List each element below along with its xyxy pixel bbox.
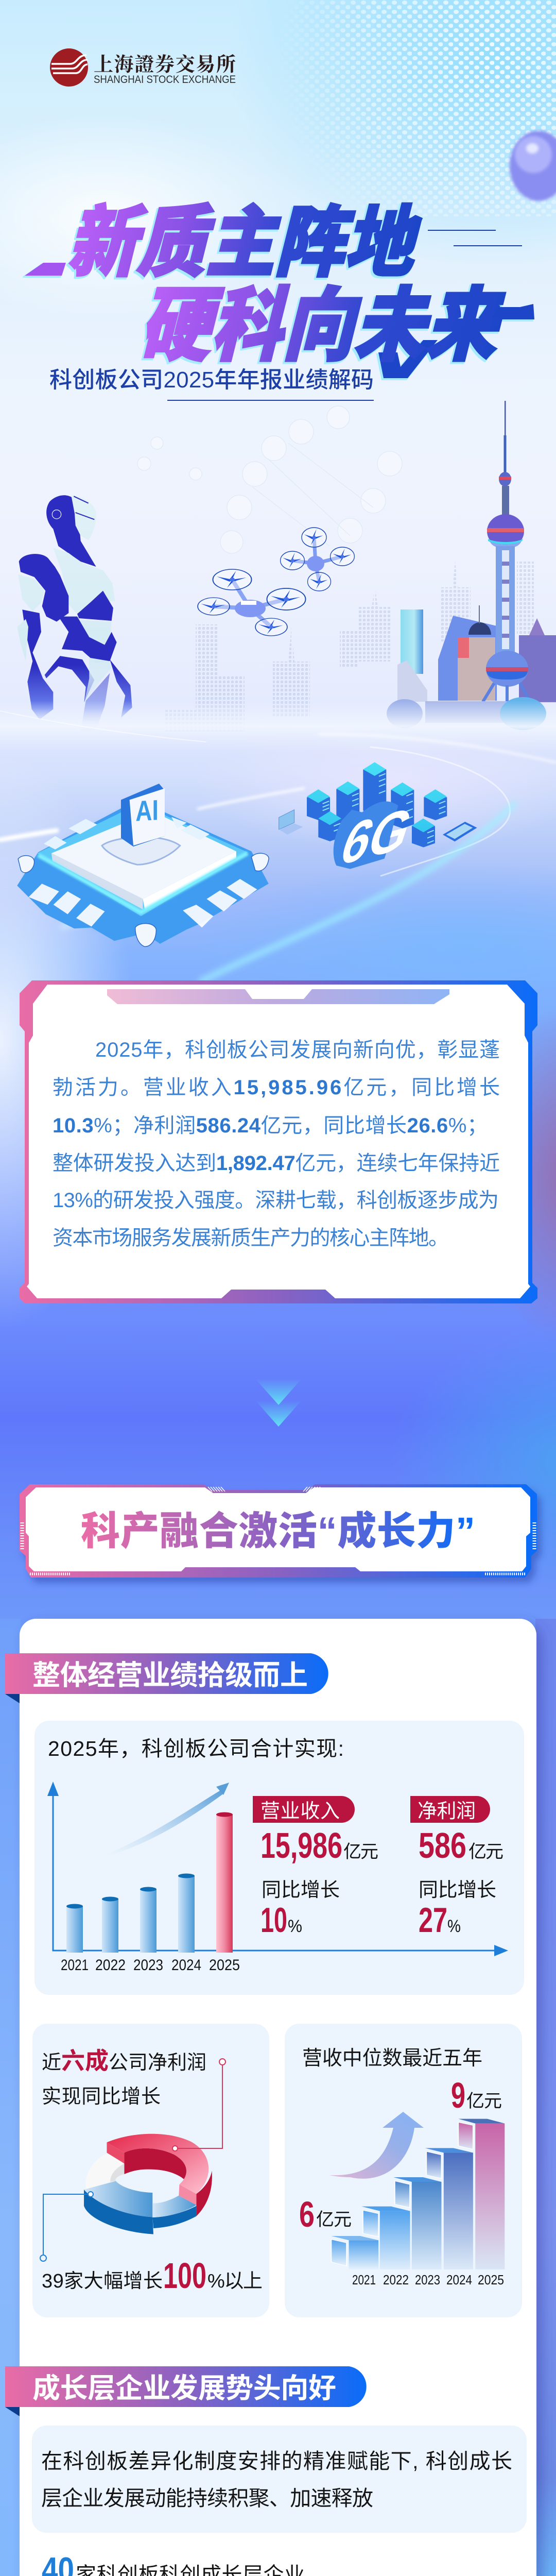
chart: revenue bars: 2023 [133, 1957, 163, 1974]
value: 2025: 亿元 [466, 2091, 502, 2111]
metric: revenue: % [288, 1917, 302, 1936]
illustration: AI chip: AI [135, 794, 159, 827]
main white card [20, 1619, 536, 2576]
year labels: 2022 [383, 2272, 409, 2287]
metric: revenue: 15,986 [260, 1825, 342, 1866]
section banner [20, 1484, 537, 1578]
title accent lines [428, 230, 522, 246]
stat: 40 companies [42, 2550, 305, 2576]
arrow: upward trend [329, 2112, 424, 2179]
title: 新质主阵地 [63, 200, 430, 286]
panel text: 近六成公司净利润 [42, 2047, 206, 2074]
metric: revenue: 同比增长 [262, 1879, 340, 1901]
logo: Shanghai Stock Exchange: 上海證券交易所 [94, 48, 236, 77]
intro paragraph [53, 1039, 500, 1249]
robot illustration [17, 495, 132, 732]
city skyline with Oriental Pearl tower [387, 401, 556, 730]
metric: net profit: 亿元 [468, 1842, 503, 1862]
year labels: 2021 [352, 2272, 376, 2287]
chart: revenue bars: 2025 [209, 1957, 240, 1974]
panel: growth-tier intro: 在科创板差异化制度安排的精准赋能下, 科创成长 [41, 2449, 512, 2473]
heading: overall performance: 整体经营业绩拾级而上 [32, 1660, 308, 1691]
panel: median revenue bars [285, 2024, 522, 2317]
year labels: 2023 [415, 2272, 440, 2287]
value: 2025: 9 [451, 2075, 465, 2115]
chart: revenue bars: 2021 [61, 1957, 89, 1974]
metric: net profit: 27 [419, 1901, 447, 1940]
panel: profitable share donut [32, 2024, 269, 2317]
title: 硬科向未来 [135, 281, 514, 370]
panel caption: %以上 [207, 2270, 263, 2292]
fog band [0, 701, 556, 752]
stepped bars [332, 2119, 505, 2269]
dotted city silhouettes [164, 562, 534, 732]
intro paragraph: 整体研发投入达到1,892.47亿元，连续七年保持近 [53, 1152, 500, 1175]
panel: growth-tier intro [32, 2426, 527, 2533]
intro paragraph: 2025年，科创板公司发展向新向优，彰显蓬 [95, 1039, 500, 1061]
year labels: 2024 [446, 2272, 472, 2287]
donut chart [84, 2134, 212, 2234]
value: 2021: 亿元 [316, 2210, 352, 2230]
arrow: chevrons [255, 1379, 302, 1427]
illustration: 6G network: 6G [333, 794, 421, 878]
panel heading: 2025年，科创板公司合计实现: [48, 1737, 344, 1760]
title [25, 200, 534, 378]
background dot pattern [297, 1, 556, 216]
metric: net profit: 同比增长 [419, 1879, 496, 1901]
value: 2021: 6 [299, 2194, 315, 2234]
year labels [352, 2272, 504, 2287]
metric: net profit: 净利润 [418, 1801, 476, 1822]
leader lines [40, 2059, 225, 2261]
heading: growth-tier companies: 成长层企业发展势头向好 [32, 2373, 336, 2404]
subtitle: 科创板公司2025年年报业绩解码 [49, 367, 374, 393]
decorative sphere [510, 131, 556, 201]
illustration: 6G network [279, 762, 477, 878]
intro paragraph: 10.3%；净利润586.24亿元，同比增长26.6%； [53, 1114, 488, 1137]
metric: revenue: 亿元 [343, 1842, 378, 1862]
metric: revenue [253, 1796, 378, 1940]
metric: revenue: 营业收入 [260, 1801, 340, 1822]
panel caption [42, 2256, 263, 2296]
metric: net profit [410, 1796, 503, 1940]
panel caption: 100 [163, 2256, 206, 2296]
chart: revenue bars [47, 1782, 508, 1974]
heading: growth-tier companies [5, 2366, 367, 2416]
value: 2021 [299, 2194, 352, 2234]
heading: overall performance [5, 1653, 328, 1703]
panel: profitable share donut: 实现同比增长 [42, 2086, 161, 2108]
faint DNA background [137, 406, 402, 553]
year labels: 2025 [478, 2272, 504, 2287]
metric: revenue: 10 [260, 1901, 287, 1940]
panel heading: 营收中位数最近五年 [302, 2047, 482, 2070]
chart: revenue bars: 2022 [95, 1957, 126, 1974]
panel: growth-tier intro: 层企业发展动能持续积聚、加速释放 [41, 2486, 373, 2510]
drone: lower [198, 569, 306, 636]
panel caption: 39家大幅增长 [42, 2270, 163, 2292]
metric: net profit: % [447, 1917, 461, 1936]
value: 2025 [451, 2075, 502, 2115]
panel: revenue and profit [34, 1721, 524, 1995]
illustration: AI chip [17, 784, 269, 946]
drone: upper [281, 528, 354, 591]
logo: Shanghai Stock Exchange [50, 48, 236, 87]
logo: Shanghai Stock Exchange: SHANGHAI STOCK EXCHANGE [94, 74, 236, 86]
intro card [20, 980, 537, 1303]
intro paragraph: 13%的研发投入强度。深耕七载，科创板逐步成为 [53, 1189, 499, 1212]
banner title: 科产融合激活“成长力” [81, 1510, 475, 1553]
intro paragraph: 勃活力。营业收入15,985.96亿元，同比增长 [53, 1076, 500, 1099]
intro paragraph: 资本市场服务发展新质生产力的核心主阵地。 [53, 1227, 449, 1249]
metric: net profit: 586 [419, 1825, 466, 1866]
light streaks [0, 711, 556, 981]
chart: revenue bars: 2024 [171, 1957, 201, 1974]
